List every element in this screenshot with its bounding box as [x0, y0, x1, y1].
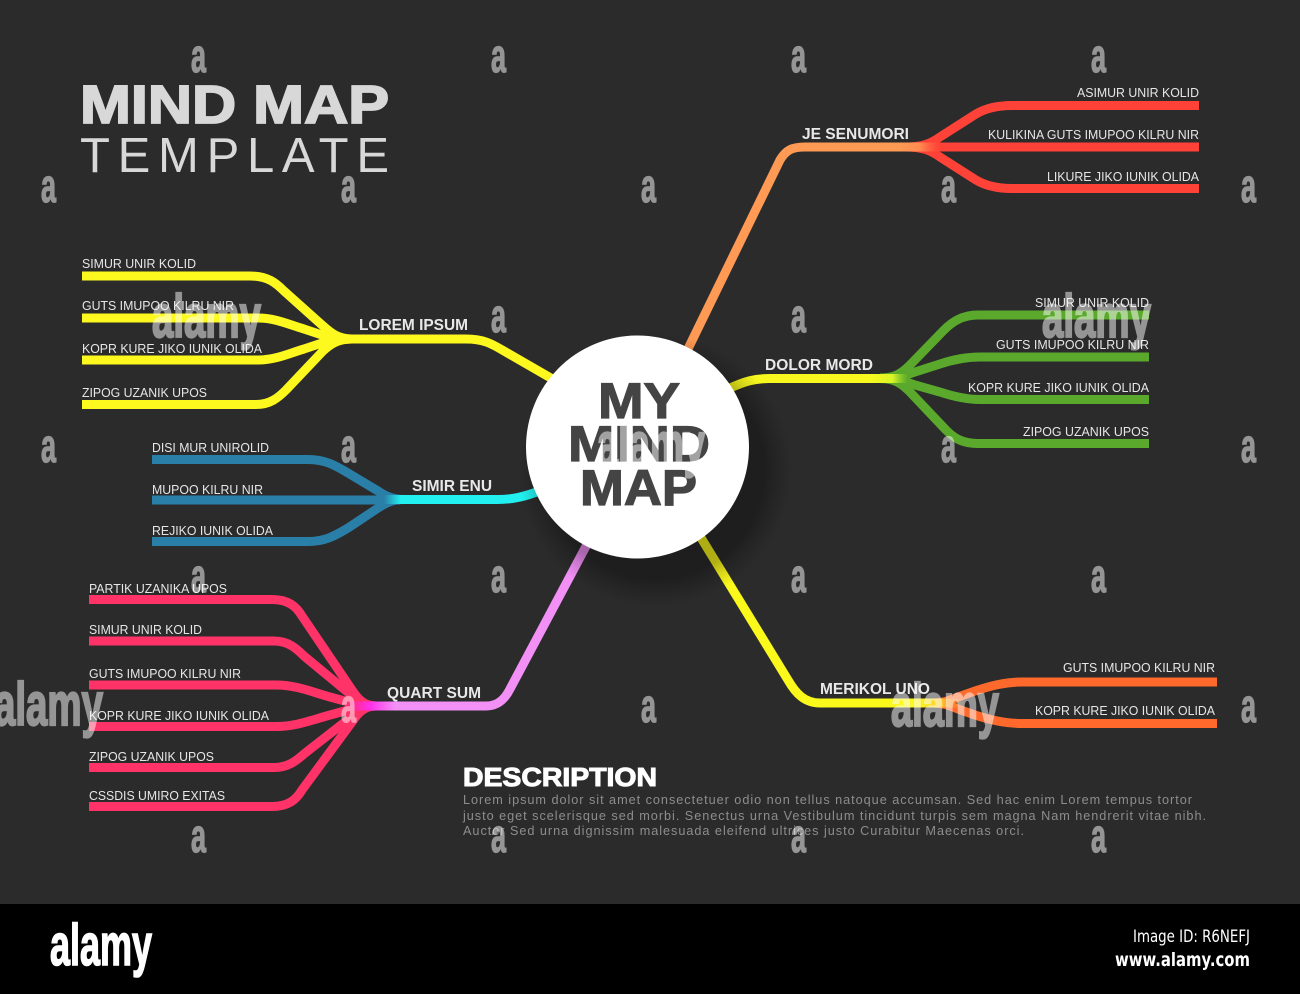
watermark: a: [191, 549, 206, 602]
watermark: a: [191, 29, 206, 82]
footer band: alamy: [50, 913, 152, 978]
watermark: alamy: [597, 411, 705, 478]
branch: je senumori: LIKURE JIKO IUNIK OLIDA: [1047, 170, 1200, 184]
description: justo eget scelerisque sed morbi. Senectus urna Vestibulum tincidunt turpis sem magna Nam hendrerit vitae nibh.: [462, 809, 1206, 823]
branch: lorem ipsum: [82, 257, 556, 404]
branch: merikol uno: KOPR KURE JIKO IUNIK OLIDA: [1035, 704, 1216, 718]
central node: MY: [598, 373, 680, 429]
watermark: a: [1091, 29, 1106, 82]
watermark: a: [1241, 679, 1256, 732]
branch: quart sum: ZIPOG UZANIK UPOS: [89, 750, 214, 764]
branch: lorem ipsum: LOREM IPSUM: [359, 317, 468, 334]
branch: lorem ipsum: SIMUR UNIR KOLID: [82, 257, 196, 271]
description: Auctor Sed urna dignissim malesuada eleifend ultrices justo Curabitur Maecenas orci.: [463, 824, 1024, 838]
central node: MAP: [580, 460, 697, 516]
title: [80, 75, 389, 183]
watermark: a: [1241, 159, 1256, 212]
branch: simir enu: DISI MUR UNIROLID: [152, 441, 269, 455]
footer band: [0, 904, 1300, 994]
branch: quart sum: SIMUR UNIR KOLID: [89, 623, 202, 637]
branch: quart sum: GUTS IMUPOO KILRU NIR: [89, 667, 241, 681]
branch: merikol uno: [695, 528, 1217, 724]
branch: dolor mord: KOPR KURE JIKO IUNIK OLIDA: [968, 381, 1150, 395]
branch: lorem ipsum: GUTS IMUPOO KILRU NIR: [82, 299, 234, 313]
watermark: a: [1241, 419, 1256, 472]
description: [462, 762, 1206, 838]
watermark: a: [491, 289, 506, 342]
branch: simir enu: [152, 441, 542, 542]
title: TEMPLATE: [80, 129, 389, 183]
watermark: a: [341, 159, 356, 212]
central node shadow: [518, 333, 792, 607]
branch: simir enu: SIMIR ENU: [412, 478, 492, 495]
branch: quart sum: QUART SUM: [387, 685, 481, 702]
central node: MIND: [568, 416, 710, 472]
branch: dolor mord: DOLOR MORD: [765, 357, 873, 374]
footer band: Image ID: R6NEFJ: [1133, 927, 1250, 947]
watermark: alamy: [152, 283, 261, 350]
branch: merikol uno: GUTS IMUPOO KILRU NIR: [1063, 661, 1215, 675]
branch: simir enu: MUPOO KILRU NIR: [152, 483, 263, 497]
title: MIND MAP: [80, 75, 389, 135]
description: Lorem ipsum dolor sit amet consectetuer odio non tellus natoque accumsan. Sed hac enim Lorem tempus tortor: [463, 793, 1193, 807]
watermark: a: [1091, 549, 1106, 602]
watermark: a: [641, 679, 656, 732]
watermark: a: [941, 159, 956, 212]
watermark: a: [191, 809, 206, 862]
watermark: a: [491, 29, 506, 82]
branch: je senumori: JE SENUMORI: [802, 126, 909, 143]
branch: dolor mord: SIMUR UNIR KOLID: [1035, 296, 1149, 310]
branch: quart sum: [89, 535, 592, 806]
watermark: a: [341, 419, 356, 472]
watermark: a: [791, 289, 806, 342]
branch: je senumori: ASIMUR UNIR KOLID: [1077, 86, 1199, 100]
branch: je senumori: KULIKINA GUTS IMUPOO KILRU NIR: [988, 128, 1199, 142]
watermark: a: [491, 549, 506, 602]
watermark: a: [491, 809, 506, 862]
watermark: alamy: [891, 672, 999, 739]
description: DESCRIPTION: [463, 762, 657, 792]
branch: simir enu: REJIKO IUNIK OLIDA: [152, 524, 274, 538]
watermark: a: [641, 159, 656, 212]
watermark: a: [791, 549, 806, 602]
branch: je senumori: [685, 86, 1200, 355]
watermark: a: [1091, 809, 1106, 862]
branch: quart sum: CSSDIS UMIRO EXITAS: [89, 789, 225, 803]
watermark: alamy: [1042, 283, 1151, 350]
watermark: a: [791, 809, 806, 862]
watermark: a: [791, 29, 806, 82]
branch: quart sum: PARTIK UZANIKA UPOS: [89, 582, 227, 596]
branch: lorem ipsum: ZIPOG UZANIK UPOS: [82, 386, 207, 400]
branch: dolor mord: GUTS IMUPOO KILRU NIR: [996, 338, 1149, 352]
branch: merikol uno: MERIKOL UNO: [820, 681, 930, 698]
branch: dolor mord: [728, 296, 1150, 444]
branch: dolor mord: ZIPOG UZANIK UPOS: [1023, 425, 1149, 439]
footer band: www.alamy.com: [1115, 949, 1250, 971]
watermark: a: [941, 419, 956, 472]
watermark: a: [41, 419, 56, 472]
branch: lorem ipsum: KOPR KURE JIKO IUNIK OLIDA: [82, 342, 263, 356]
watermark: a: [341, 679, 356, 732]
branch: quart sum: KOPR KURE JIKO IUNIK OLIDA: [89, 709, 270, 723]
watermark: a: [41, 159, 56, 212]
central node: [526, 336, 749, 558]
